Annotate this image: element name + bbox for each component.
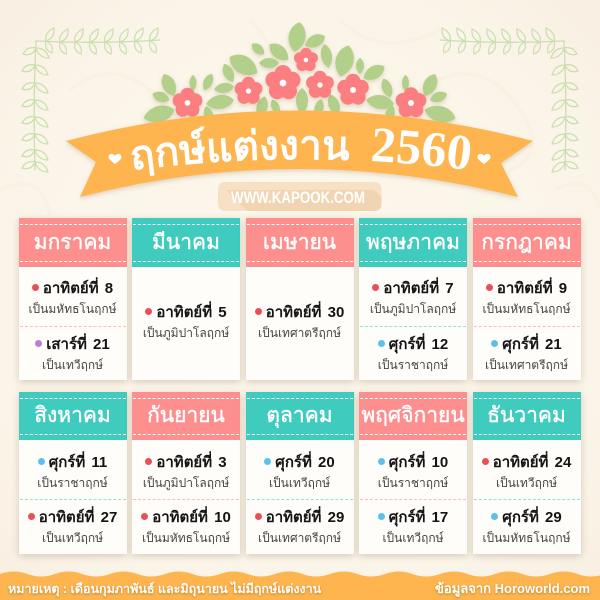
month heading: สิงหาคม: [34, 404, 111, 427]
month heading: มกราคม: [34, 231, 111, 254]
month heading: [246, 392, 354, 440]
date: Sunday 30: อาทิตย์ที่ 30: [266, 304, 344, 321]
month heading: พฤษภาคม: [366, 231, 460, 254]
month heading: [132, 392, 240, 440]
month heading: [246, 218, 354, 267]
banner title: [131, 126, 470, 176]
panel: December: [472, 392, 580, 554]
date: Sunday 7: เป็นภูมิปาโลฤกษ์: [370, 302, 456, 316]
date: Sunday 29: [255, 506, 344, 545]
date: Friday 10: [378, 451, 448, 490]
date: Friday 17: เป็นเทวีฤกษ์: [382, 531, 444, 545]
month heading: พฤศจิกายน: [361, 404, 465, 427]
date: Sunday 24: [482, 451, 572, 490]
panel: August: [18, 392, 126, 554]
date: Friday 11: ศุกร์ที่ 11: [49, 454, 107, 471]
date: Friday 20: [264, 451, 335, 490]
background swirls: [0, 20, 600, 215]
date: Sunday 3: อาทิตย์ที่ 3: [156, 454, 227, 471]
month heading: [359, 392, 467, 440]
date: Saturday 21: เสาร์ที่ 21: [46, 336, 110, 353]
flowers: [173, 48, 426, 117]
date: Sunday 29: อาทิตย์ที่ 29: [266, 509, 344, 526]
vine: top right: [440, 28, 578, 172]
date: Friday 29: ศุกร์ที่ 29: [502, 509, 562, 526]
date: Sunday 9: [482, 277, 571, 316]
date: Friday 21: ศุกร์ที่ 21: [502, 336, 562, 353]
date: Sunday 27: อาทิตย์ที่ 27: [39, 509, 117, 526]
footer wave band: [0, 572, 600, 600]
date: Sunday 8: [28, 277, 117, 316]
date: Friday 12: ศุกร์ที่ 12: [389, 336, 448, 353]
footer note: หมายเหตุ : เดือนกุมภาพันธ์ และมิถุนายน ไม่มีฤกษ์แต่งงาน: [8, 582, 321, 596]
panel: May: [359, 218, 467, 380]
footer source: ข้อมูลจาก Horoworld.com: [435, 581, 590, 596]
date: Sunday 7: อาทิตย์ที่ 7: [383, 280, 454, 297]
date: Friday 11: เป็นราชาฤกษ์: [37, 476, 108, 490]
month heading: กรกฎาคม: [481, 231, 572, 254]
month heading: เมษายน: [263, 231, 336, 254]
date: Sunday 30: [255, 301, 344, 340]
month heading: [359, 218, 467, 267]
date: Friday 21: เป็นเทศาตรีฤกษ์: [485, 358, 568, 372]
date: Sunday 24: เป็นเทวีฤกษ์: [496, 476, 557, 490]
date: Saturday 21: [35, 333, 110, 372]
date: Sunday 5: เป็นภูมิปาโลฤกษ์: [143, 326, 229, 340]
date: Sunday 24: อาทิตย์ที่ 24: [493, 454, 571, 471]
date: Sunday 10: อาทิตย์ที่ 10: [152, 509, 231, 526]
month heading: มีนาคม: [152, 231, 220, 254]
panel: July: [472, 218, 580, 380]
date: Sunday 9: เป็นมหัทธโนฤกษ์: [482, 302, 571, 316]
month heading: [18, 218, 126, 267]
date: Sunday 30: เป็นเทศาตรีฤกษ์: [258, 326, 341, 340]
icon: left heart: [108, 154, 122, 164]
ribbon banner: [66, 110, 533, 197]
website badge: WWW.KAPOOK.COM: [231, 188, 365, 207]
panel: September: [132, 392, 240, 554]
date: Friday 17: [378, 506, 448, 545]
date: Friday 21: [485, 333, 568, 372]
panel: March: [132, 218, 240, 380]
date: Sunday 5: อาทิตย์ที่ 5: [156, 304, 227, 321]
date: Friday 29: [482, 506, 571, 545]
month heading: กันยายน: [147, 404, 225, 427]
date: Sunday 27: เป็นเทวีฤกษ์: [42, 531, 103, 545]
month heading: [132, 218, 240, 267]
panel: April: [246, 218, 354, 380]
date: Friday 12: [378, 333, 448, 372]
month heading: ตุลาคม: [266, 404, 333, 427]
date: Sunday 8: อาทิตย์ที่ 8: [43, 280, 113, 297]
date: Sunday 10: เป็นมหัทธโนฤกษ์: [142, 531, 230, 545]
date: Friday 10: ศุกร์ที่ 10: [389, 454, 448, 471]
date: Sunday 3: เป็นภูมิปาโลฤกษ์: [143, 476, 229, 490]
date: Saturday 21: เป็นเทวีฤกษ์: [42, 358, 103, 372]
icon: right heart: [478, 154, 490, 164]
date: Friday 20: เป็นเทวีฤกษ์: [269, 476, 330, 490]
panel: October: [246, 392, 354, 554]
panel: January: [18, 218, 126, 380]
banner title: 2560: [372, 128, 470, 170]
date: Sunday 7: [370, 277, 456, 316]
vine: top left: [22, 28, 160, 172]
date: Sunday 5: [143, 301, 229, 340]
month heading: [472, 392, 580, 440]
banner title: ฤกษ์แต่งงาน: [131, 126, 350, 176]
date: Sunday 3: [143, 451, 229, 490]
date: Sunday 10: [141, 506, 231, 545]
month heading: [472, 218, 580, 267]
month heading: ธันวาคม: [487, 404, 566, 427]
date: Friday 12: เป็นราชาฤกษ์: [378, 358, 448, 372]
leaves: [141, 21, 458, 126]
date: Friday 17: ศุกร์ที่ 17: [389, 509, 448, 526]
date: Sunday 8: เป็นมหัทธโนฤกษ์: [28, 302, 117, 316]
date: Friday 10: เป็นราชาฤกษ์: [378, 476, 448, 490]
date: Sunday 27: [28, 506, 117, 545]
date: Friday 29: เป็นมหัทธโนฤกษ์: [482, 531, 571, 545]
date: Friday 20: ศุกร์ที่ 20: [275, 454, 335, 471]
date: Sunday 29: เป็นเทศาตรีฤกษ์: [258, 531, 341, 545]
date: Sunday 9: อาทิตย์ที่ 9: [497, 280, 567, 297]
month heading: [18, 392, 126, 440]
panel: November: [359, 392, 467, 554]
date: Friday 11: [37, 451, 108, 490]
website badge: [218, 182, 382, 211]
